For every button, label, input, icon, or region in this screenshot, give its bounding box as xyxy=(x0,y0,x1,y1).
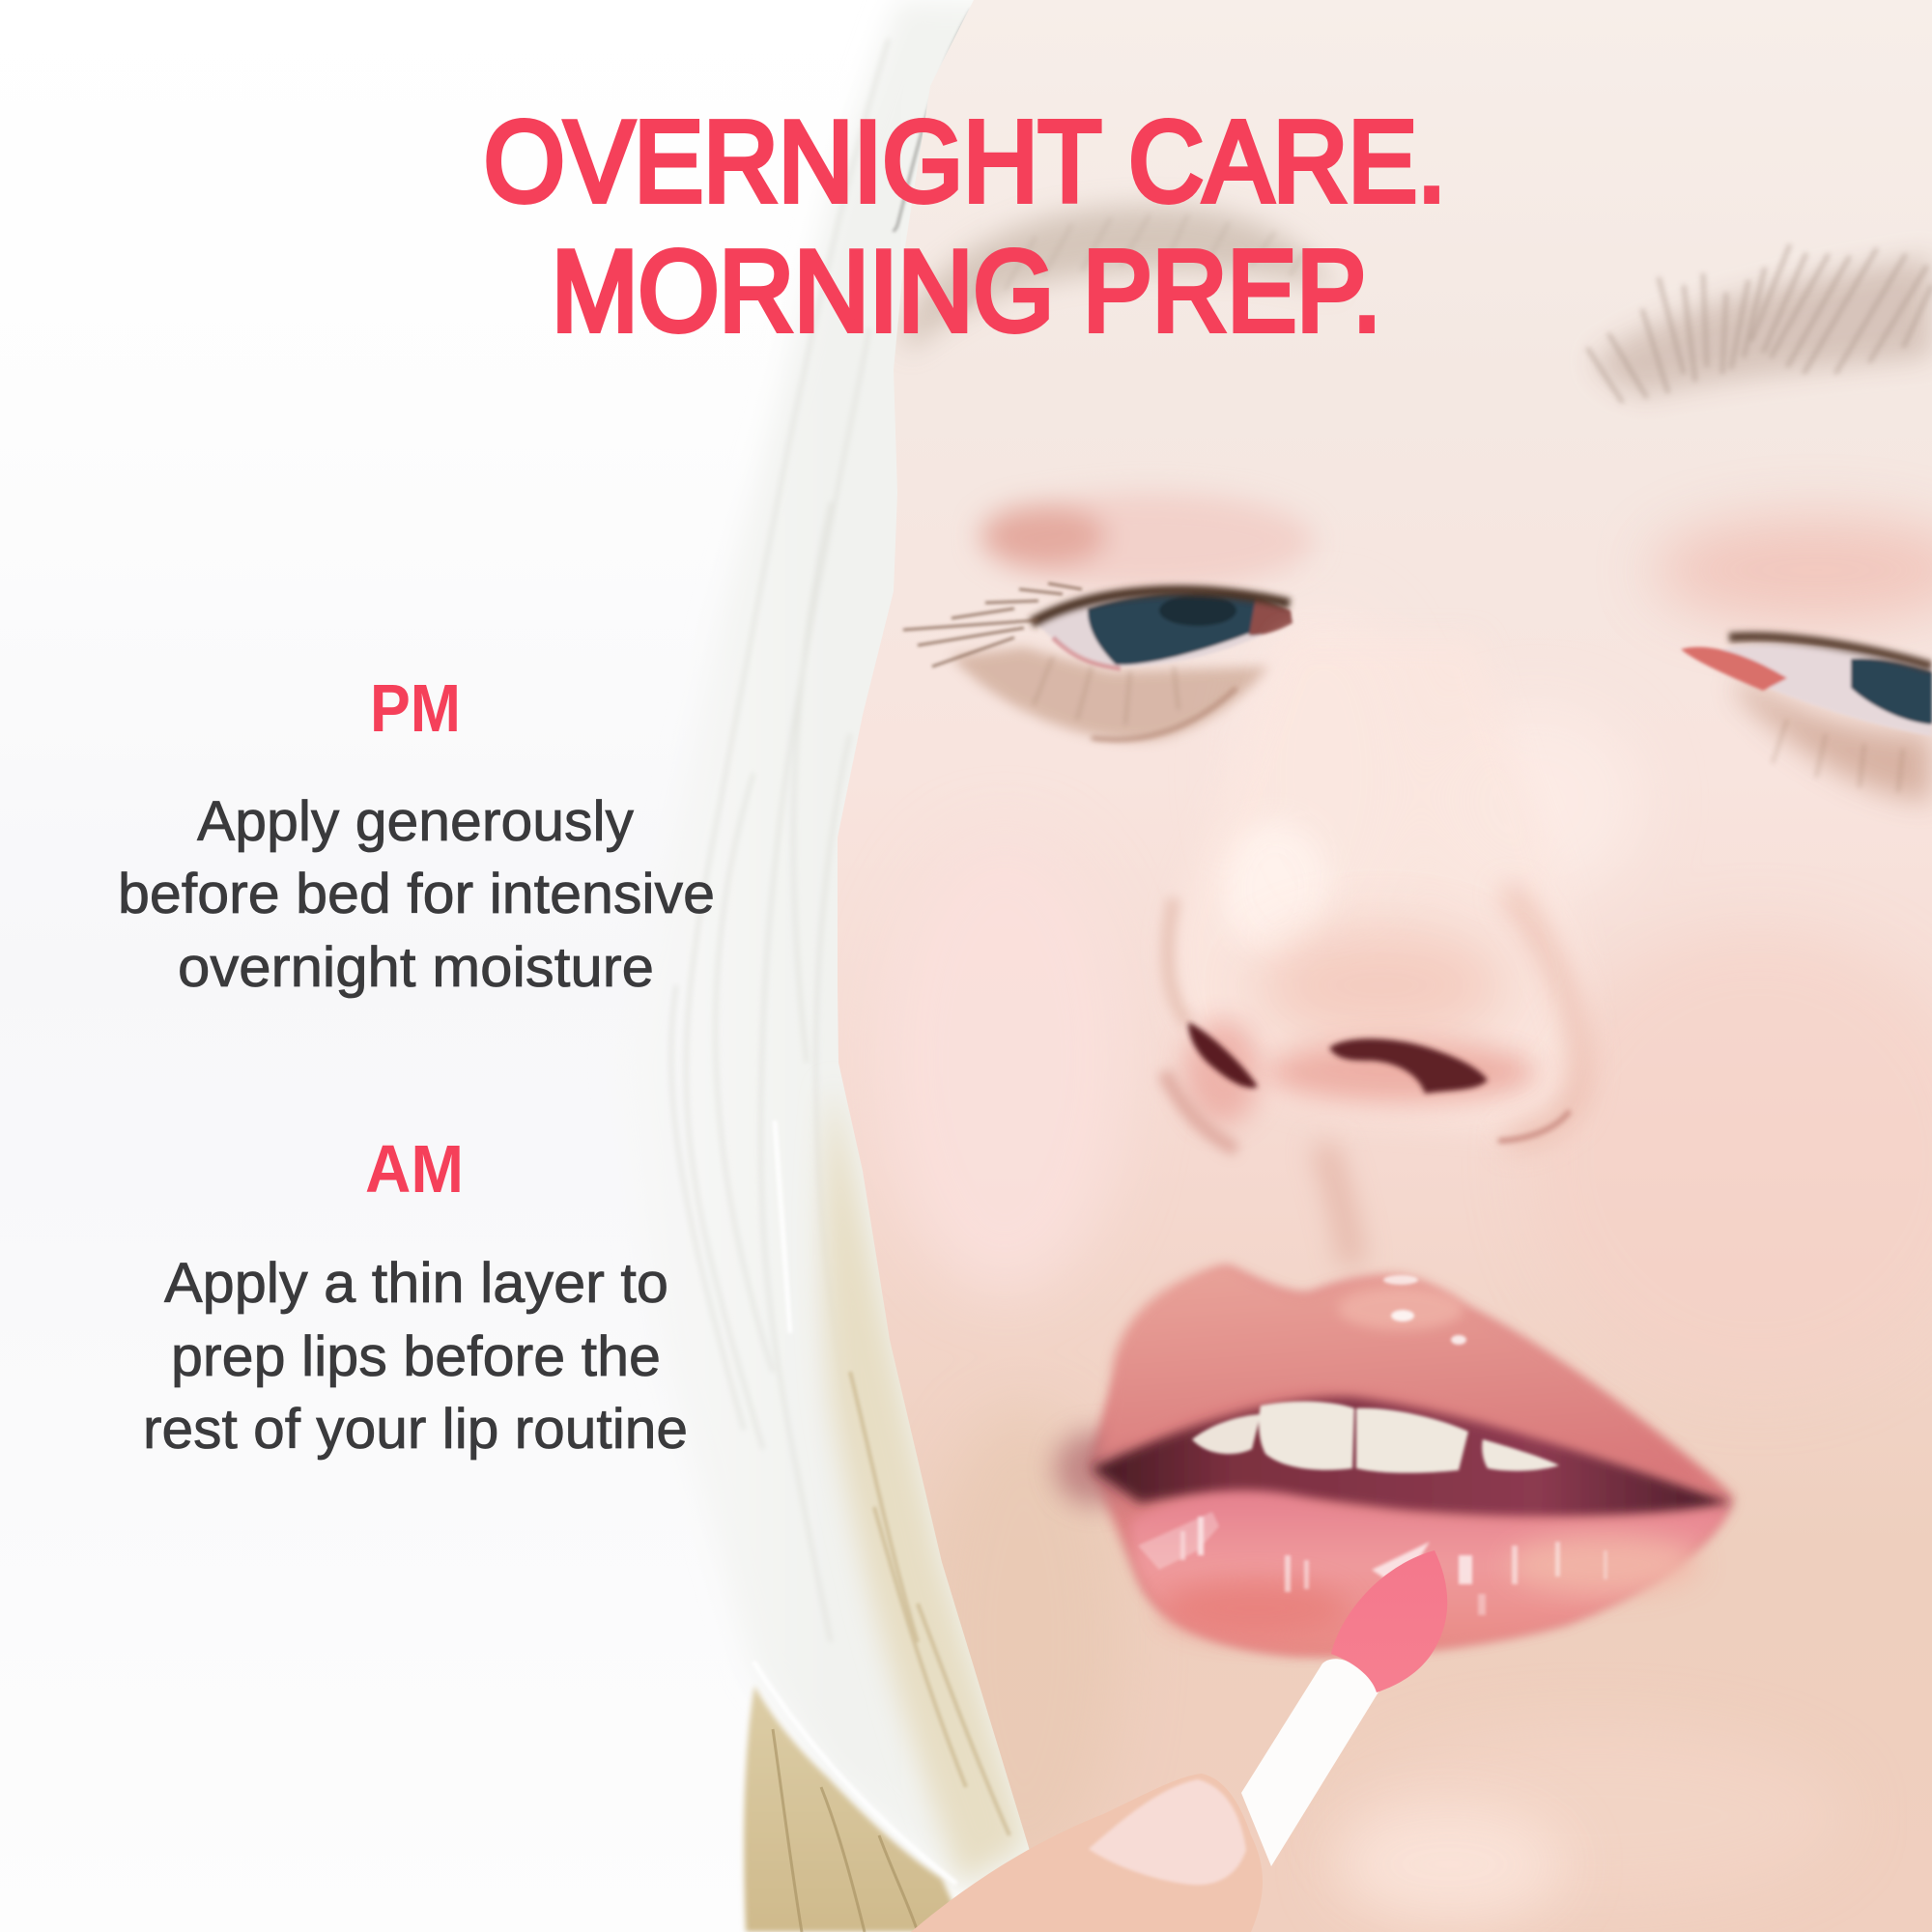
left under-eye shadow xyxy=(952,647,1270,740)
lip base xyxy=(1089,1267,1734,1655)
PM description: Apply generously xyxy=(197,790,634,853)
nose xyxy=(1164,638,1586,1265)
nostril right xyxy=(1329,1038,1488,1094)
left eye lashes xyxy=(903,583,1082,667)
nose crease xyxy=(1498,1111,1570,1141)
right eye xyxy=(1681,637,1932,736)
applicator pink tip xyxy=(1331,1550,1447,1692)
PM description xyxy=(118,790,715,999)
PM description: overnight moisture xyxy=(178,936,654,999)
lower lip xyxy=(1130,1492,1729,1655)
philtrum xyxy=(1323,1145,1352,1265)
right eyebrow xyxy=(1587,244,1932,403)
face xyxy=(831,0,1932,1932)
cream hair strip along the jaw xyxy=(824,1082,1028,1884)
AM description xyxy=(143,1252,688,1461)
teeth xyxy=(1192,1402,1559,1473)
finger xyxy=(911,1774,1263,1932)
AM heading: AM xyxy=(365,1131,464,1207)
PM section xyxy=(118,670,715,999)
PM heading: PM xyxy=(370,670,461,746)
gray strand at hairline xyxy=(894,10,972,232)
mouth interior xyxy=(1092,1396,1731,1519)
left eye xyxy=(903,583,1293,668)
blond hair streaks xyxy=(850,1372,1009,1835)
glow on chin xyxy=(1333,1806,1565,1922)
left under-eye lashes xyxy=(1034,657,1179,724)
AM section xyxy=(143,1131,688,1461)
eyeshadow: left xyxy=(980,493,1314,589)
AM description: Apply a thin layer to xyxy=(164,1252,668,1315)
AM description: rest of your lip routine xyxy=(143,1398,688,1461)
upper lip xyxy=(1096,1266,1729,1495)
hair white highlights xyxy=(753,1121,956,1884)
title xyxy=(484,98,1446,355)
photo: model with lip applicator xyxy=(618,0,1932,1932)
upper lip gloss highlights xyxy=(1383,1275,1466,1345)
hair xyxy=(618,0,1063,1932)
skin shading xyxy=(908,776,1927,1849)
AM description: prep lips before the xyxy=(171,1325,661,1388)
title: MORNING PREP. xyxy=(552,227,1381,355)
lower blond hair xyxy=(744,1686,966,1932)
lip corner shadow xyxy=(1055,1432,1132,1505)
right under-eye shadow xyxy=(1739,676,1932,802)
left eyebrow xyxy=(903,206,1338,353)
PM description: before bed for intensive xyxy=(118,863,715,925)
white hair strands xyxy=(671,39,889,1642)
fingernail xyxy=(1089,1779,1246,1885)
applicator stick xyxy=(1241,1659,1379,1866)
applicator xyxy=(1241,1550,1447,1866)
nostril left xyxy=(1188,1022,1258,1088)
title: OVERNIGHT CARE. xyxy=(484,98,1446,226)
eyeshadow: right xyxy=(1652,517,1932,623)
lower lip gloss highlights xyxy=(1138,1512,1607,1615)
